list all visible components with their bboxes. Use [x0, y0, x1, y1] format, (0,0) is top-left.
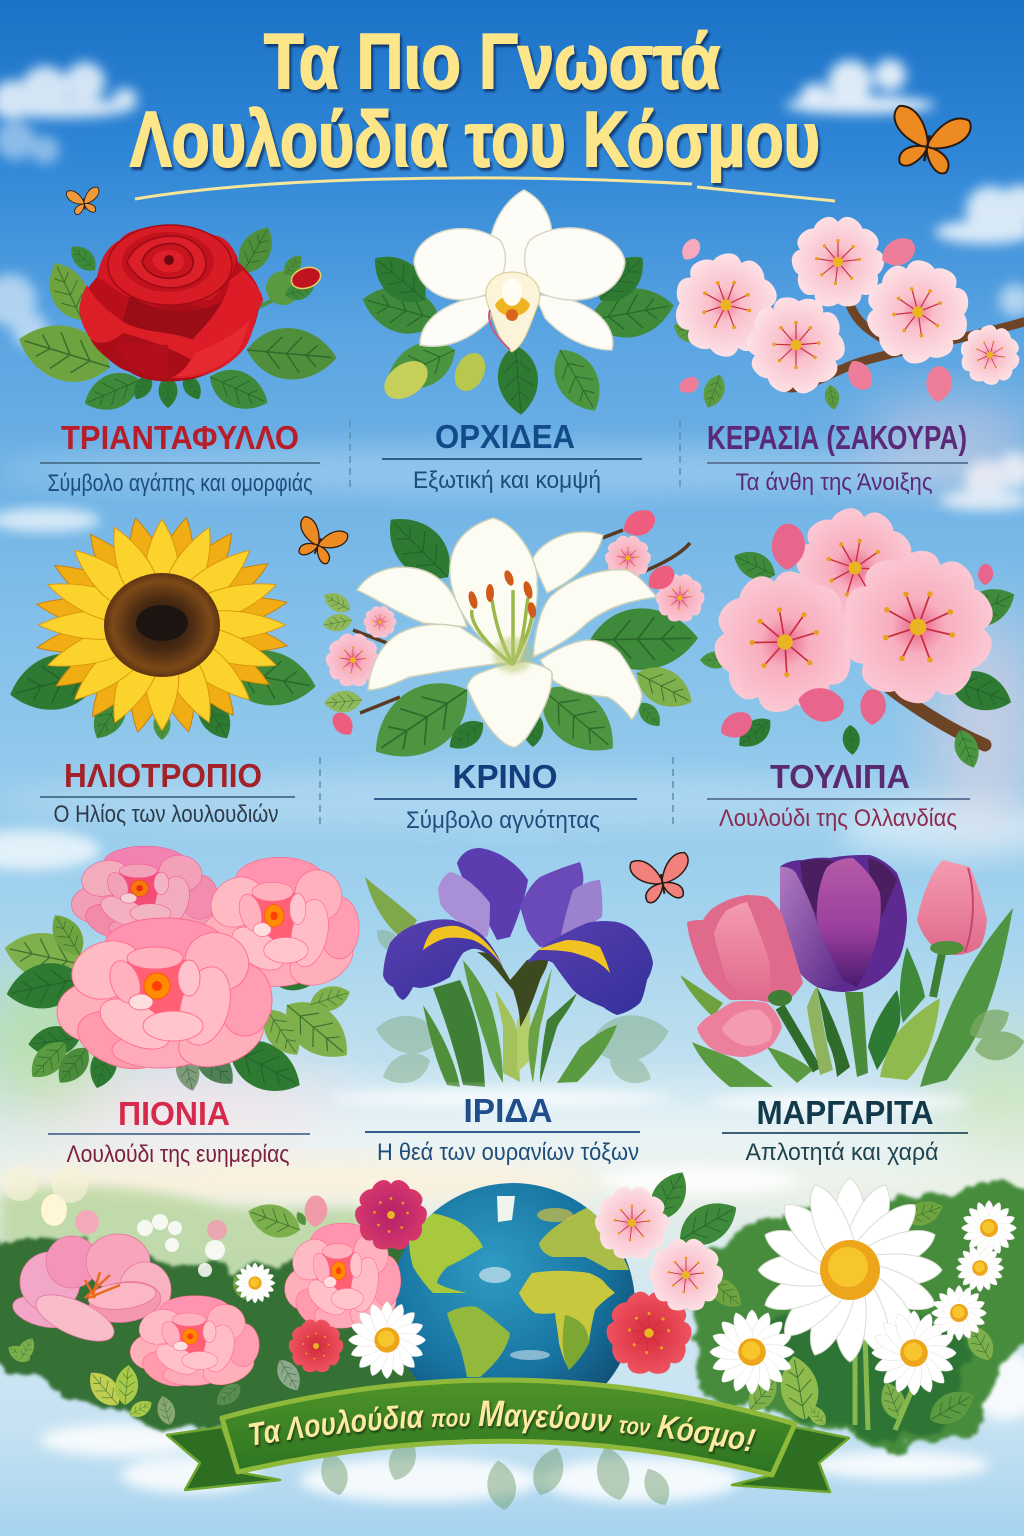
faded foreground leaves: [316, 1433, 675, 1512]
label: peony: Λουλούδι της ευημερίας: [66, 1141, 290, 1168]
label: daisy: [722, 1094, 968, 1166]
label: daisy: Απλοτητά και χαρά: [746, 1139, 939, 1166]
banner: [166, 1378, 850, 1494]
open pink flower: [9, 1234, 171, 1351]
label: daisy: ΜΑΡΓΑΡΙΤΑ: [756, 1094, 934, 1131]
label: iris: [365, 1092, 640, 1166]
label: sunflower: [40, 757, 295, 828]
title: [130, 17, 835, 201]
flower: blossom cluster: [697, 499, 1022, 771]
title: Τα Πιο Γνωστά: [264, 17, 720, 105]
flower: orchid: [357, 190, 678, 421]
label: peony: [48, 1095, 310, 1168]
icon: large butterfly: [885, 105, 972, 177]
flower: tulips: [680, 855, 1024, 1087]
globe: [394, 1183, 634, 1384]
label: tulip: Λουλούδι της Ολλανδίας: [719, 805, 957, 832]
label: sunflower: Ο Ηλίος των λουλουδιών: [54, 801, 278, 828]
label: cherry blossom: Τα άνθη της Άνοιξης: [736, 469, 932, 496]
label: sunflower: ΗΛΙΟΤΡΟΠΙΟ: [64, 757, 262, 794]
flower: cherry blossom branch: [653, 217, 1024, 421]
label: lily: ΚΡΙΝΟ: [452, 758, 558, 795]
flower: rose: [11, 220, 339, 419]
label: rose: ΤΡΙΑΝΤΑΦΥΛΛΟ: [61, 419, 299, 456]
label: orchid: [382, 418, 642, 494]
label: lily: Σύμβολο αγνότητας: [406, 807, 600, 834]
soft mist under third row: [330, 1089, 970, 1111]
dividers: [320, 420, 680, 825]
icon: small butterfly: [66, 187, 102, 216]
icon: orange butterfly: [290, 515, 349, 568]
bottom flowers: [9, 1178, 1017, 1395]
icon: pink butterfly: [629, 852, 694, 905]
banner text: Τα Λουλούδια που Μαγεύουν τον Κόσμο!: [248, 1400, 758, 1455]
label: tulip: ΤΟΥΛΙΠΑ: [770, 758, 910, 795]
flower: lily: [320, 503, 707, 778]
banner tails: [167, 1427, 849, 1492]
flower: peony bouquet: [0, 846, 361, 1105]
label: cherry blossom: [707, 419, 968, 496]
label: iris: Η θεά των ουρανίων τόξων: [377, 1139, 639, 1166]
flower: iris: [365, 848, 673, 1091]
title: Λουλούδια του Κόσμου: [130, 95, 820, 183]
label: iris: ΙΡΙΔΑ: [464, 1092, 552, 1129]
label: rose: [40, 419, 320, 497]
label: orchid: Εξωτική και κομψή: [413, 467, 601, 494]
label: rose: Σύμβολο αγάπης και ομορφιάς: [48, 470, 312, 497]
label: lily: [374, 758, 637, 834]
flower: sunflower: [3, 515, 320, 745]
banner body: [222, 1380, 795, 1475]
label: tulip: [707, 758, 970, 832]
label: peony: ΠΙΟΝΙΑ: [118, 1095, 230, 1132]
label: orchid: ΟΡΧΙΔΕΑ: [435, 418, 575, 455]
meadow: [0, 1165, 1024, 1448]
